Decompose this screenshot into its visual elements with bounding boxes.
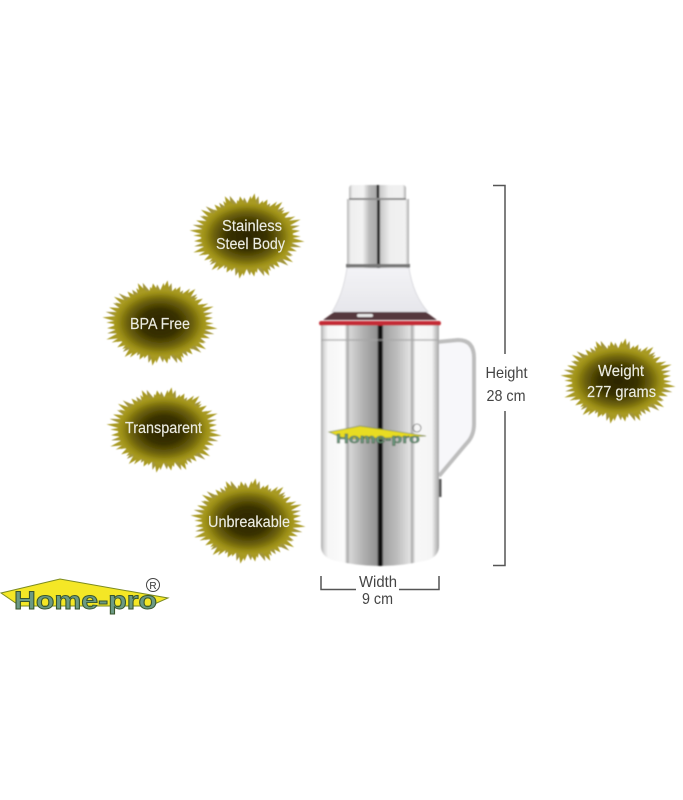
- steel cap: [347, 199, 409, 268]
- badge: Stainless Steel Body: Steel Body: [216, 236, 285, 253]
- badge: Transparent: Transparent: [125, 420, 202, 437]
- handle: [437, 340, 474, 476]
- badge: Stainless Steel Body: [188, 190, 306, 282]
- badge: Weight: [559, 335, 677, 427]
- height dimension: 28 cm: [486, 388, 526, 405]
- width dimension: Width: [359, 574, 397, 591]
- badge: Stainless Steel Body: Stainless: [222, 218, 282, 235]
- badge: BPA Free: BPA Free: [130, 316, 190, 333]
- badge: Unbreakable: [189, 475, 307, 567]
- width dimension: 9 cm: [362, 591, 393, 608]
- Home-pro logo: Home-pro: [14, 587, 157, 615]
- bottle: [319, 185, 474, 566]
- height dimension: [486, 186, 528, 566]
- badge: Weight: 277 grams: [587, 384, 656, 401]
- badge: Weight: Weight: [598, 363, 645, 380]
- small logo on bottle: Home-pro: [336, 431, 420, 446]
- dark gasket: [323, 312, 437, 320]
- width dimension: [321, 574, 439, 608]
- badge: Transparent: [105, 384, 223, 476]
- Home-pro logo: R: [149, 581, 157, 592]
- Home-pro logo: [1, 578, 168, 615]
- height dimension: Height: [486, 365, 528, 382]
- badge: BPA Free: [101, 277, 219, 369]
- glass cone: [332, 268, 428, 312]
- red ring: [319, 321, 441, 326]
- small logo on bottle: [329, 424, 426, 446]
- steel body: [321, 325, 439, 566]
- badge: Unbreakable: Unbreakable: [208, 514, 290, 531]
